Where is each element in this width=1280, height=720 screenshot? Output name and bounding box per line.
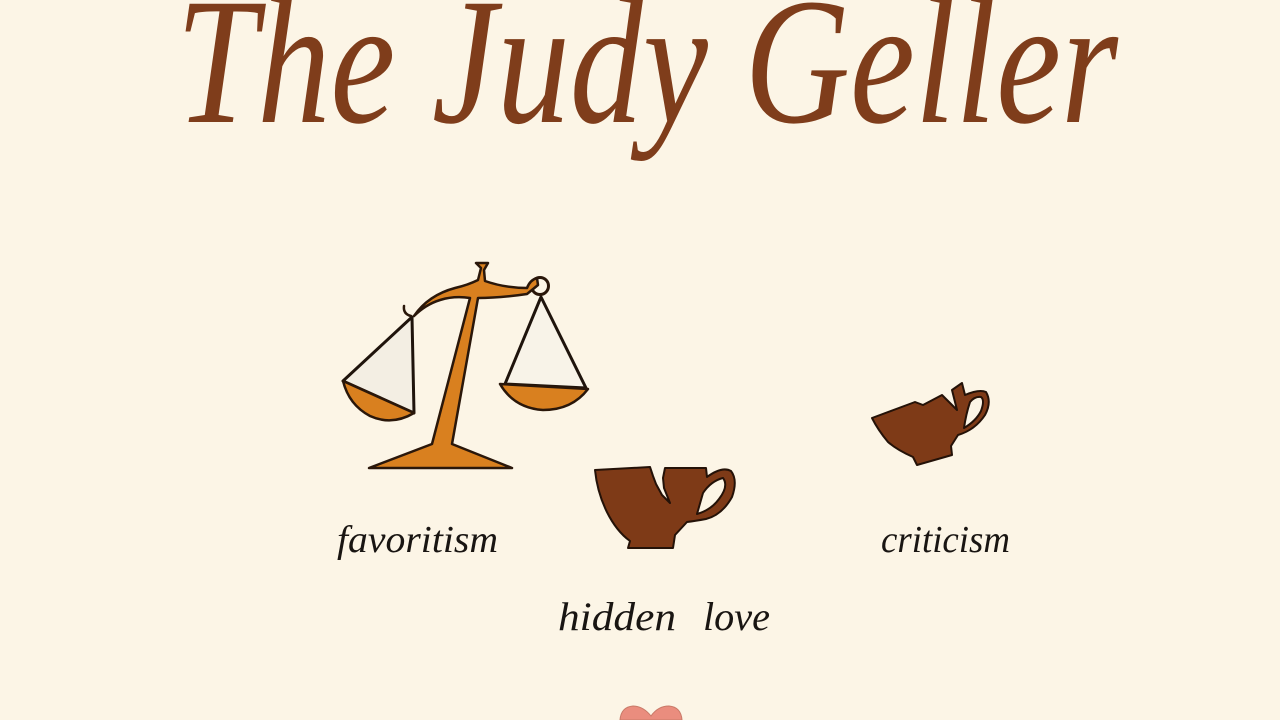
icon: heart: [620, 706, 682, 720]
scale stand and beam: [369, 263, 538, 468]
icon: tilted balance scale: [343, 263, 588, 468]
label: criticism: criticism: [881, 519, 1010, 561]
icon: large chipped cup: [595, 467, 735, 548]
label: favoritism: favoritism: [337, 519, 498, 561]
icon: small tilted broken cup: [872, 383, 989, 465]
right scale pan: [500, 297, 588, 410]
left scale pan: [343, 317, 414, 420]
label: hidden love: hidden: [558, 594, 676, 639]
scale ring: [532, 278, 548, 294]
label: hidden love: love: [703, 594, 770, 639]
left beam hook: [404, 306, 411, 316]
